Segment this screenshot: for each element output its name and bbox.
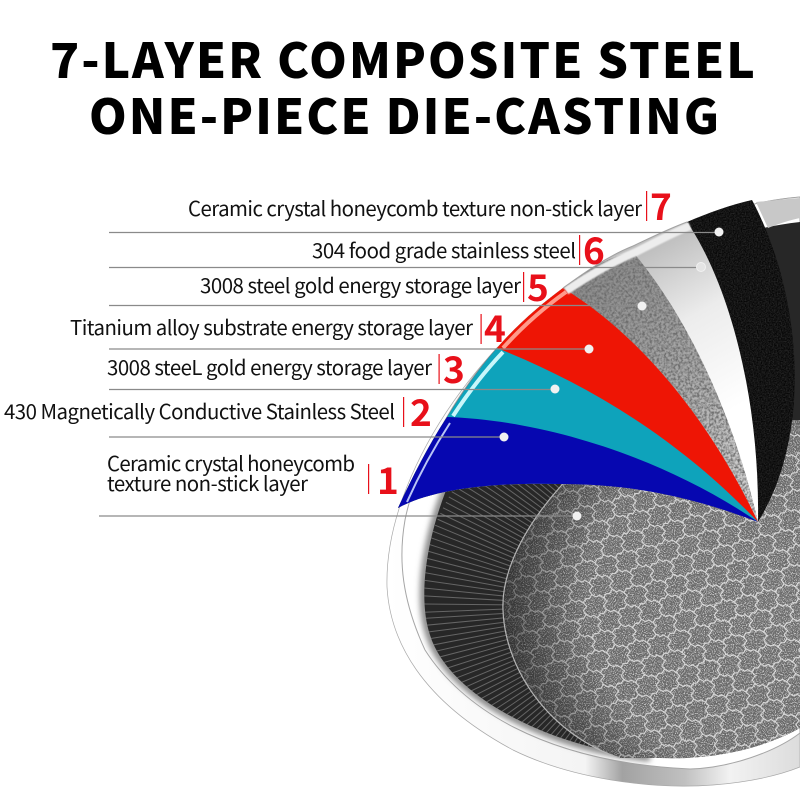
- title: ONE-PIECE DIE-CASTING: [89, 78, 719, 148]
- label 7: [188, 177, 672, 231]
- honeycomb edge ring: [503, 420, 640, 758]
- label 1: Ceramic crystal honeycomb: [107, 447, 355, 477]
- label 2: 430 Magnetically Conductive Stainless Steel: [4, 395, 395, 425]
- layer 5: grey speckle: [398, 252, 758, 522]
- label 3: 3: [443, 340, 465, 394]
- label 5: [200, 258, 549, 312]
- label 4: 4: [484, 299, 506, 353]
- title: [50, 22, 755, 148]
- label 3: 3008 steeL gold energy storage layer: [107, 351, 432, 381]
- frying pan with honeycomb surface: [387, 197, 800, 786]
- glossy rim highlights: [407, 222, 690, 502]
- label 3: [107, 340, 465, 394]
- upper rim band behind wedge: [756, 198, 800, 228]
- label 5: 5: [527, 258, 549, 312]
- honeycomb cooking surface: [480, 420, 800, 765]
- layer 7: black: [398, 200, 795, 522]
- label 2: [4, 383, 432, 437]
- layer 3: teal: [398, 348, 758, 522]
- label 6: 6: [583, 221, 605, 275]
- label 5: 3008 steel gold energy storage layer: [200, 269, 521, 299]
- pan rim underside: [387, 197, 800, 786]
- label 1: [107, 447, 399, 505]
- layer 6: white steel: [398, 222, 758, 522]
- label 1: texture non-stick layer: [107, 467, 308, 497]
- label 4: [70, 299, 506, 353]
- dark sloped pan wall: [424, 222, 800, 758]
- layer 4: red: [398, 288, 758, 522]
- layer 2: blue: [398, 417, 758, 522]
- label 2: 2: [410, 383, 432, 437]
- layered cutaway wedge: [398, 200, 795, 522]
- leader lines and dots: [99, 228, 724, 520]
- label 7: 7: [650, 177, 672, 231]
- white rim top face: [402, 197, 800, 769]
- label 6: [312, 221, 605, 275]
- title: 7-LAYER COMPOSITE STEEL: [50, 22, 755, 92]
- shadow around pan wall: [424, 440, 650, 757]
- radial wall ribs: [503, 420, 640, 758]
- label 6: 304 food grade stainless steel: [312, 234, 576, 264]
- label 4: Titanium alloy substrate energy storage layer: [70, 311, 473, 341]
- label 1: 1: [377, 451, 399, 505]
- label 7: Ceramic crystal honeycomb texture non-stick layer: [188, 192, 642, 222]
